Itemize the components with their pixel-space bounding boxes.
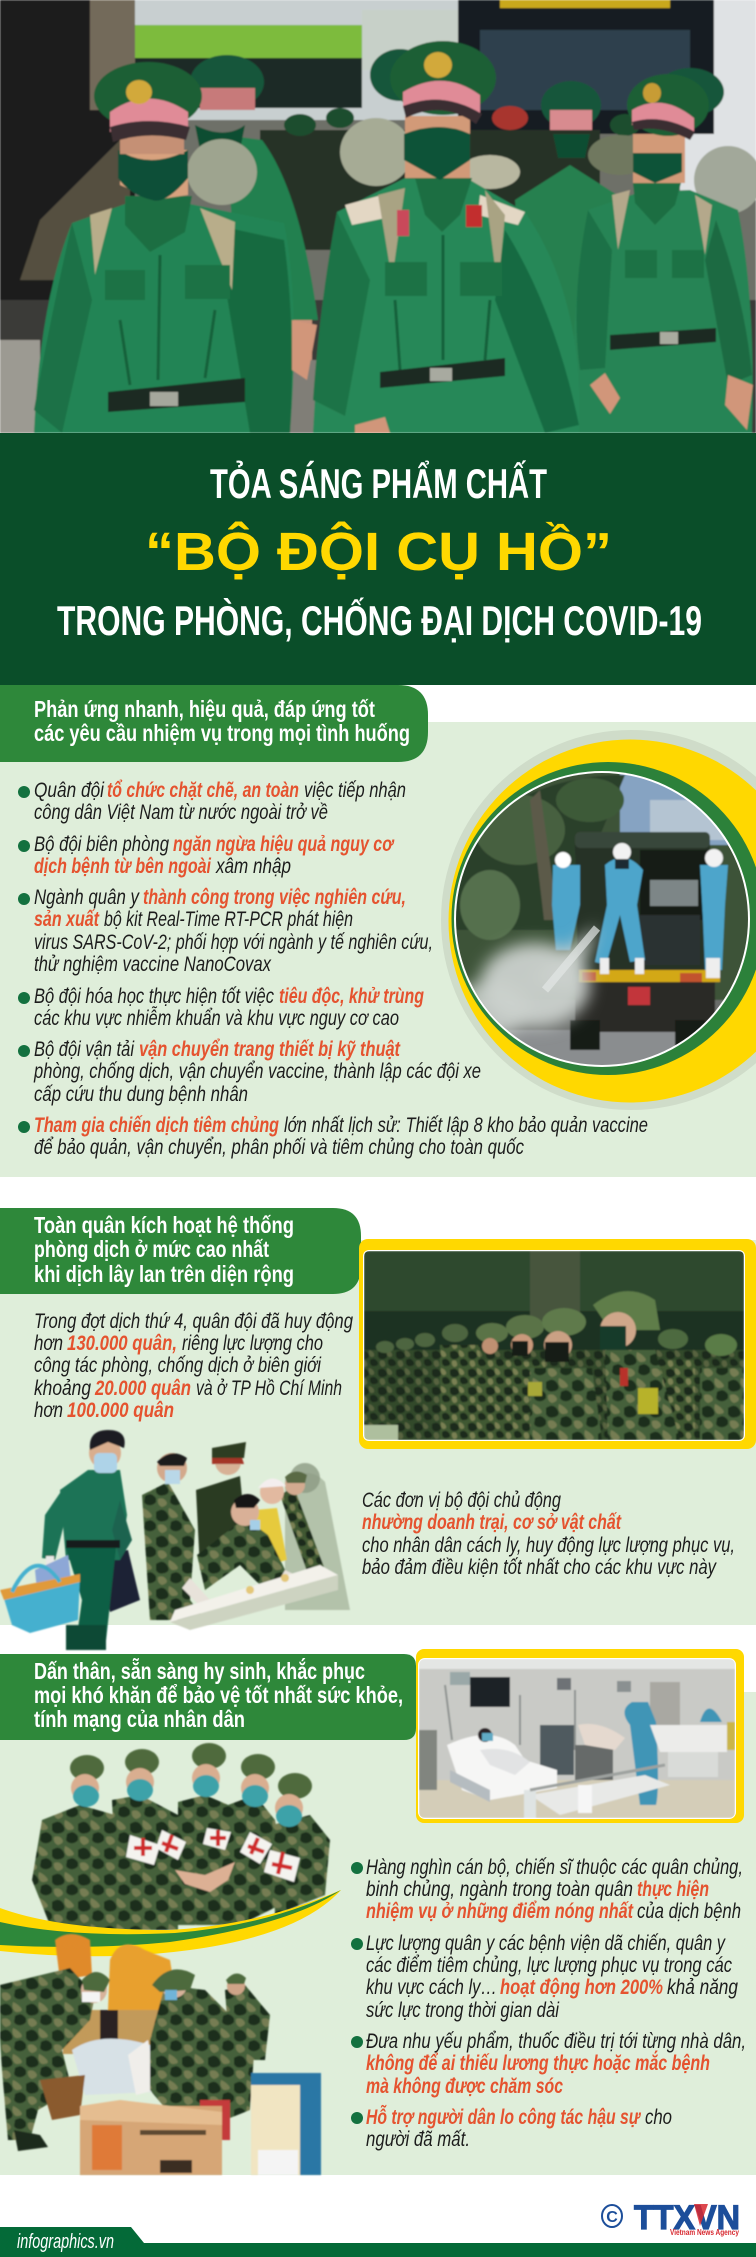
soldier B (313, 41, 580, 433)
logo: TTXVN: TTXVN (634, 2199, 740, 2237)
bullet 1 (351, 1856, 743, 1923)
section 3 heading (0, 1654, 416, 1740)
bullet 5: Bộ đội vận tải (34, 1038, 135, 1061)
section 2 paragraph 1: riêng lực lượng cho (182, 1332, 323, 1355)
soldier behind right (515, 81, 625, 340)
title line 2: “BỘ ĐỘI CỤ HỒ” (145, 521, 612, 582)
bullet 2: xâm nhập (215, 855, 291, 878)
bullet 5: phòng, chống dịch, vận chuyển vaccine, thành lập các đội xe (33, 1060, 481, 1083)
bullet 6: lớn nhất lịch sử: Thiết lập 8 kho bảo quản vaccine (284, 1114, 648, 1137)
bullet 1: Quân đội (34, 779, 105, 802)
section 3 heading: mọi khó khăn để bảo vệ tốt nhất sức khỏe, (34, 1682, 403, 1708)
section 3 figure: soldiers with relief goods (0, 1934, 321, 2175)
footer bar with site name (0, 2227, 756, 2257)
truck (576, 844, 710, 970)
bullet 4: Bộ đội hóa học thực hiện tốt việc (34, 985, 274, 1008)
panel: section 2 background (0, 1240, 756, 1625)
figures in blue suits (552, 865, 580, 950)
bullet 2 (351, 1932, 738, 2022)
bullet 5: cấp cứu thu dung bệnh nhân (34, 1083, 248, 1106)
bullet 4: người đã mất. (366, 2128, 470, 2151)
bullet 3: virus SARS-CoV-2; phối hợp với ngành y tế nghiên cứu, (34, 931, 433, 954)
soldier A (34, 62, 294, 433)
bullet 2: ngăn ngừa hiệu quả nguy cơ (173, 833, 394, 856)
soldier behind left (190, 55, 318, 360)
bullet 1: việc tiếp nhận (304, 779, 406, 802)
crowd behind (260, 49, 724, 250)
bullet 2: sức lực trong thời gian dài (366, 1999, 560, 2022)
bullet 2: hoạt động hơn 200% (500, 1976, 663, 1999)
section 3 heading: tính mạng của nhân dân (34, 1706, 245, 1732)
logo: TTXVN: Vietnam News Agency (670, 2228, 739, 2237)
bullet 3: sản xuất (34, 908, 100, 931)
section 1 photo: circular disinfection photo (441, 730, 756, 1110)
section 2 heading: Toàn quân kích hoạt hệ thống (34, 1212, 294, 1238)
section 3 figure: five medics joining hands (32, 1743, 330, 1930)
bullet 4: các khu vực nhiễm khuẩn và khu vực nguy cơ cao (34, 1007, 399, 1030)
bullet 2 (18, 833, 394, 878)
bullet 3: thử nghiệm vaccine NanoCovax (34, 953, 272, 976)
bullet 6: Tham gia chiến dịch tiêm chủng (34, 1114, 279, 1137)
soldier C (573, 74, 753, 433)
section 2 figure: soldiers preparing food (0, 1430, 350, 1650)
title line 1: TỎA SÁNG PHẨM CHẤT (210, 459, 547, 507)
bullet 6 (18, 1114, 648, 1159)
section 2 paragraph 2 (362, 1489, 735, 1579)
helmets (187, 139, 257, 205)
water spray (450, 925, 598, 1038)
section 3 photo: hospital ward (416, 1649, 744, 1823)
section 3 bullet list (351, 1856, 746, 2151)
bullet 4: Hỗ trợ người dân lo công tác hậu sự (366, 2106, 642, 2129)
swoosh: green inner curve (0, 1890, 341, 1947)
section 2 paragraph 1: hơn (34, 1332, 63, 1355)
bullet 2: khả năng (667, 1976, 738, 1999)
panel: section 1 background (0, 722, 756, 1177)
section 2 paragraph 2: nhường doanh trại, cơ sở vật chất (362, 1511, 622, 1534)
section 2 heading (0, 1208, 361, 1294)
bullet 4 (18, 985, 424, 1030)
section 1 bullet list (18, 779, 648, 1159)
section 1 heading: Phản ứng nhanh, hiệu quả, đáp ứng tốt (34, 696, 375, 722)
section 2 paragraph 1: 130.000 quân, (67, 1332, 177, 1355)
section 2 paragraph 1: Trong đợt dịch thứ 4, quân đội đã huy động (34, 1310, 353, 1333)
section 2 photo: troop formation (359, 1239, 756, 1449)
section 2 paragraph 1 (34, 1310, 353, 1422)
bullet 3: Ngành quân y (34, 886, 140, 909)
swoosh: yellow and green curve (0, 1890, 341, 1956)
bullet 1: tổ chức chặt chẽ, an toàn (107, 779, 299, 802)
bullet 2: khu vực cách ly… (366, 1976, 497, 1999)
bullet 4: cho (645, 2106, 672, 2129)
panel: section 3 background (0, 1692, 756, 2175)
section 2 paragraph 1: khoảng (34, 1377, 91, 1400)
section 2 heading: khi dịch lây lan trên diện rộng (34, 1261, 294, 1287)
bullet 1 (18, 779, 406, 824)
footer bar with site name: infographics.vn (17, 2231, 114, 2253)
bullet 3: bộ kit Real-Time RT-PCR phát hiện (104, 908, 353, 931)
title band (0, 433, 756, 685)
section 2 paragraph 1: công tác phòng, chống dịch ở biên giới (34, 1354, 322, 1377)
bullet 4: tiêu độc, khử trùng (279, 985, 424, 1008)
bullet 3: thành công trong việc nghiên cứu, (143, 886, 406, 909)
bullet 2: Bộ đội biên phòng (34, 833, 169, 856)
bullet 1: thực hiện (637, 1878, 709, 1901)
section 2 paragraph 1: 20.000 quân (94, 1377, 191, 1400)
hands (292, 320, 753, 433)
section 2 paragraph 1: và ở TP Hồ Chí Minh (196, 1377, 342, 1400)
section 2 paragraph 1: hơn (34, 1399, 63, 1422)
bullet 3: mà không được chăm sóc (366, 2075, 563, 2098)
logo: TTXVN: C (606, 2209, 618, 2226)
bullet 4 (351, 2106, 672, 2151)
bullet 2: dịch bệnh từ bên ngoài (34, 855, 212, 878)
bullet 1: binh chủng, ngành trong toàn quân (366, 1878, 633, 1901)
section 1 heading (0, 685, 428, 762)
section 2 paragraph 2: Các đơn vị bộ đội chủ động (362, 1489, 561, 1512)
bullet 3 (351, 2030, 746, 2098)
section 1 heading: các yêu cầu nhiệm vụ trong mọi tình huống (34, 720, 410, 746)
bullet 1: công dân Việt Nam từ nước ngoài trở về (34, 801, 328, 824)
section 2 heading: phòng dịch ở mức cao nhất (34, 1236, 269, 1262)
hero photo: soldiers marching (0, 0, 756, 433)
bullet 1: nhiệm vụ ở những điểm nóng nhất (366, 1900, 634, 1923)
bullet 5 (18, 1038, 481, 1106)
section 3 heading: Dấn thân, sẵn sàng hy sinh, khắc phục (34, 1657, 365, 1684)
bullet 3 (18, 886, 433, 976)
bullet 6: để bảo quản, vận chuyển, phân phối và tiêm chủng cho toàn quốc (34, 1136, 524, 1159)
section 2 paragraph 1: 100.000 quân (67, 1399, 174, 1422)
bullet 5: vận chuyển trang thiết bị kỹ thuật (139, 1038, 401, 1061)
